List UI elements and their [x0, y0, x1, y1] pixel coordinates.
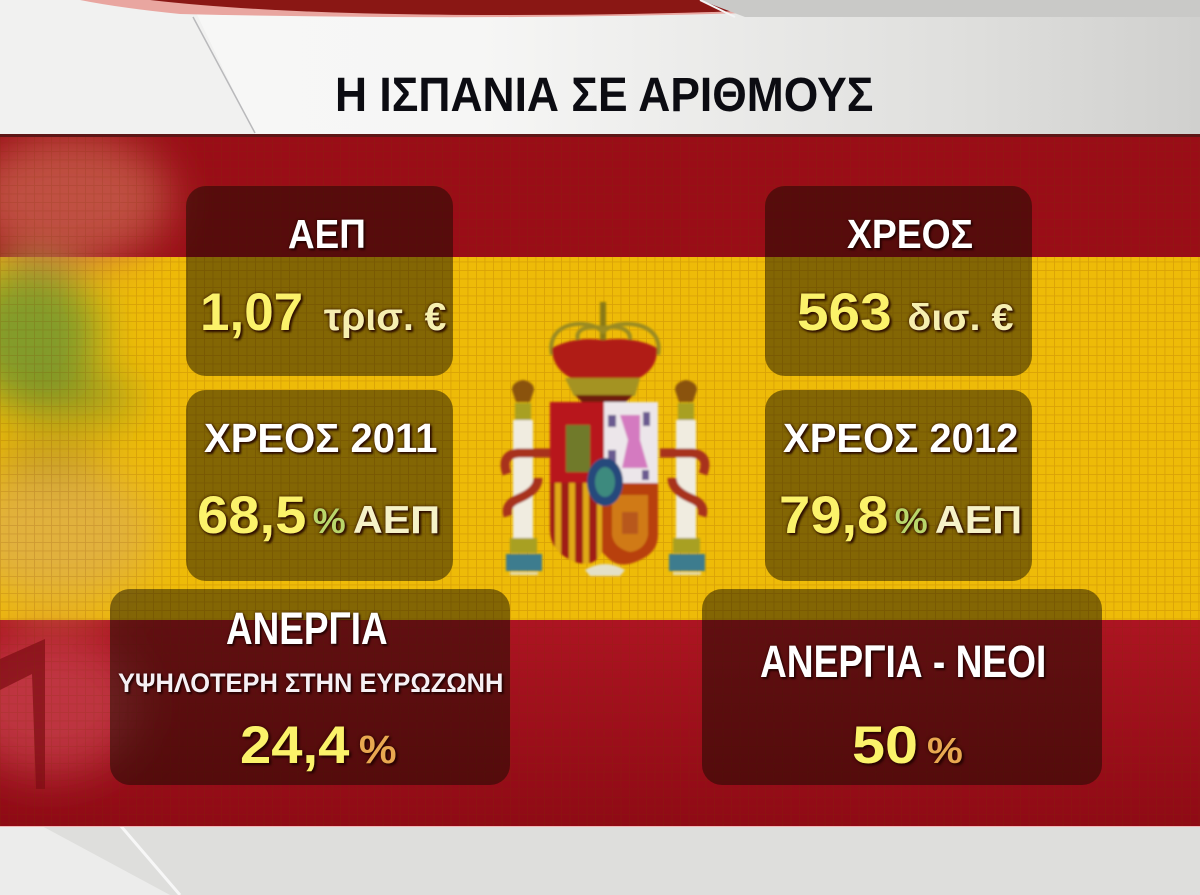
crown	[551, 302, 659, 402]
ribbons	[505, 453, 550, 516]
value: 50%: 50%	[852, 716, 963, 775]
label: ΧΡΕΟΣ 2012: ΧΡΕΟΣ 2012	[783, 415, 1018, 461]
label: ΧΡΕΟΣ 2011: ΧΡΕΟΣ 2011	[204, 415, 437, 461]
top grey banner background	[0, 0, 1200, 134]
label: ΥΨΗΛΟΤΕΡΗ ΣΤΗΝ ΕΥΡΩΖΩΝΗ: ΥΨΗΛΟΤΕΡΗ ΣΤΗΝ ΕΥΡΩΖΩΝΗ	[118, 668, 503, 698]
label: ΑΝΕΡΓΙΑ: ΑΝΕΡΓΙΑ	[226, 603, 388, 654]
castle	[566, 425, 590, 472]
icon: Spanish coat of arms	[499, 300, 711, 578]
label: ΑΝΕΡΓΙΑ - ΝΕΟΙ: ΑΝΕΡΓΙΑ - ΝΕΟΙ	[760, 636, 1046, 687]
shield quarters	[550, 402, 658, 573]
panel: ΧΡΕΟΣ 2012	[765, 390, 1032, 581]
panel: ΑΕΠ	[186, 186, 453, 376]
panel: ΑΝΕΡΓΙΑ	[110, 589, 510, 785]
central oval	[587, 458, 623, 506]
panel: ΧΡΕΟΣ 2011	[186, 390, 453, 581]
left pillar	[506, 380, 542, 575]
right pillar	[669, 380, 705, 575]
value: 24,4%: 24,4%	[240, 716, 397, 775]
bottom grey band	[0, 826, 1200, 895]
label: ΑΕΠ: ΑΕΠ	[288, 211, 366, 257]
lion	[620, 415, 648, 468]
value: 68,5% ΑΕΠ: 68,5% ΑΕΠ	[197, 486, 440, 545]
panel: ΑΝΕΡΓΙΑ - ΝΕΟΙ	[702, 589, 1102, 785]
value: 563 δισ. €: 563 δισ. €	[797, 283, 1013, 342]
pomegranate	[585, 564, 625, 576]
title: Η ΙΣΠΑΝΙΑ ΣΕ ΑΡΙΘΜΟΥΣ	[335, 69, 873, 122]
value: 79,8% ΑΕΠ: 79,8% ΑΕΠ	[779, 486, 1022, 545]
panel: ΧΡΕΟΣ	[765, 186, 1032, 376]
value: 1,07 τρισ. €: 1,07 τρισ. €	[200, 283, 446, 342]
label: ΧΡΕΟΣ: ΧΡΕΟΣ	[847, 211, 973, 257]
Spanish flag background	[0, 134, 1200, 826]
